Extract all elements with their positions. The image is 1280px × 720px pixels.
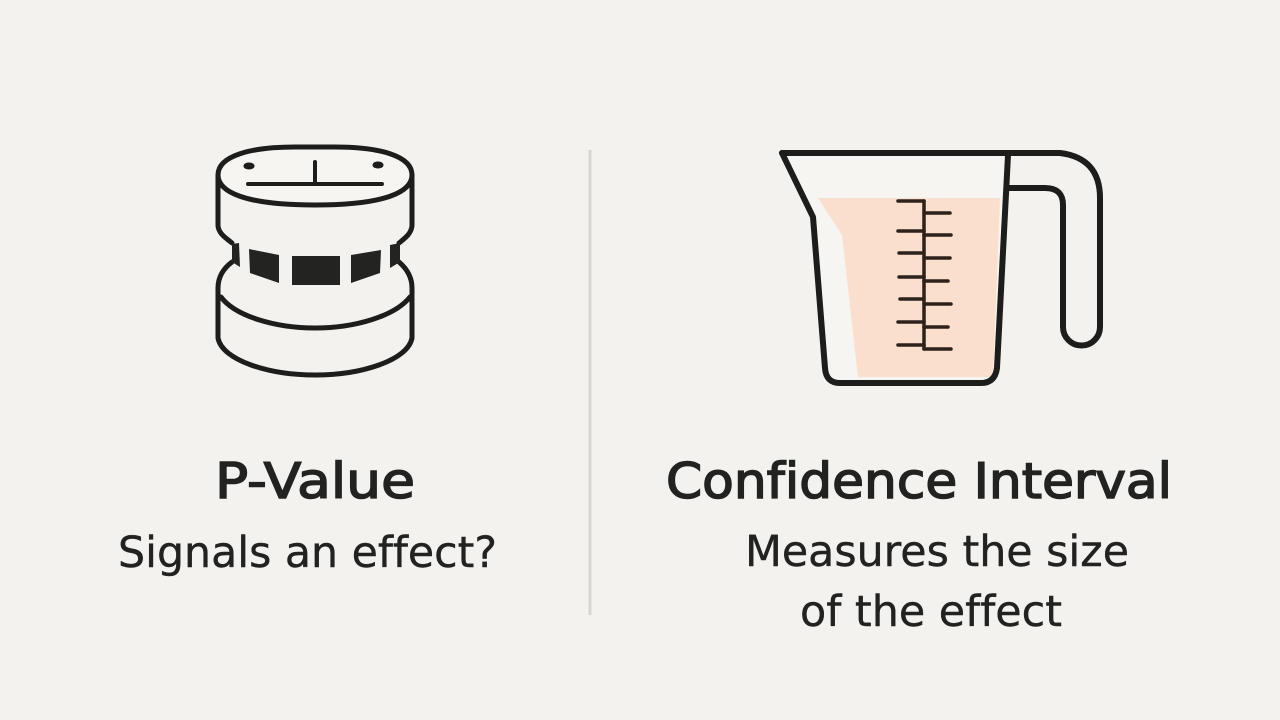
text: Confidence Interval description: of the effect	[800, 587, 1062, 637]
text: Confidence Interval description: Measures the size	[745, 527, 1129, 577]
heading: P-Value: P-Value	[215, 453, 415, 510]
text: P-Value description: Signals an effect?	[118, 528, 497, 578]
icon: p-value dial cylinder	[218, 147, 412, 375]
liquid fill	[818, 198, 1000, 377]
text: Confidence Interval description	[745, 527, 1129, 637]
icon: measuring jug	[782, 153, 1100, 383]
measurement scale	[898, 201, 951, 349]
heading: Confidence Interval: Confidence Interval	[666, 453, 1172, 510]
jug outline and handle	[782, 153, 1100, 383]
